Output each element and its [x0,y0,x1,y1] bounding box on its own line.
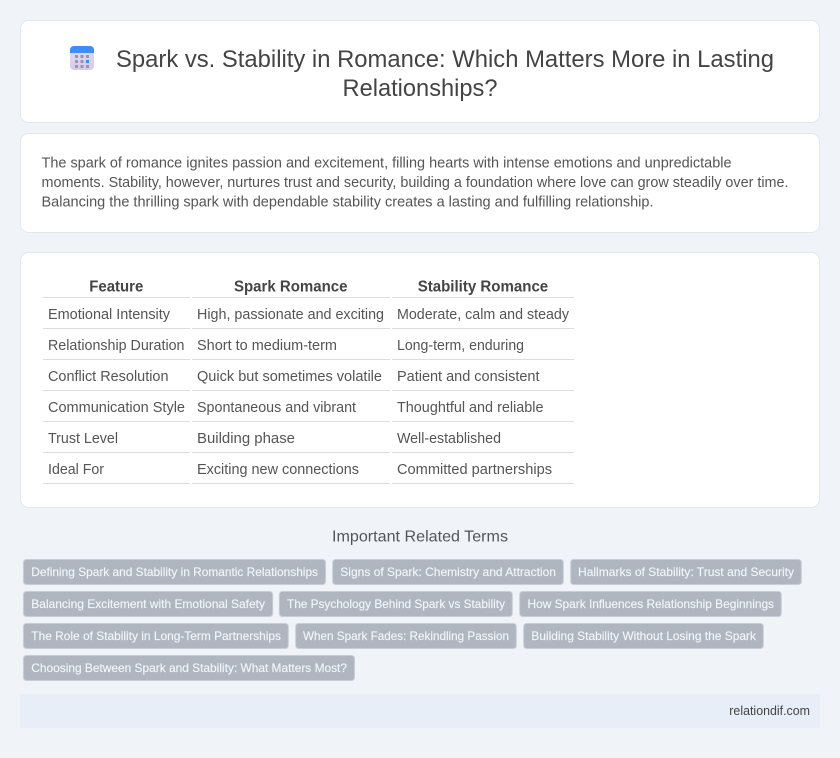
icon: calendar [70,46,94,70]
title: Relationships? [342,75,498,102]
row: conflict resolution: Quick but sometimes volatile [197,369,382,385]
tag: Hallmarks of Stability: Trust and Security [578,565,794,579]
intro paragraph [42,156,788,210]
row: relationship duration: Long-term, enduring [397,338,524,354]
intro paragraph: moments. Stability, however, nurtures trust and security, building a foundation where love can grow steadily over time. [42,175,788,191]
tag [524,624,763,648]
panel: header card [20,20,820,122]
tag [296,624,516,648]
row: ideal for: Ideal For [48,462,104,478]
row: communication style: Thoughtful and reliable [397,400,544,416]
tag: Defining Spark and Stability in Romantic Relationships [31,565,318,579]
tag [24,624,288,648]
tag: How Spark Influences Relationship Beginnings [528,597,774,611]
title: Spark vs. Stability in Romance: Which Matters More in Lasting [116,46,774,73]
intro paragraph: Balancing the thrilling spark with dependable stability creates a lasting and fulfilling relationship. [42,194,654,210]
table header [89,278,549,296]
row: relationship duration [48,338,524,354]
tag: The Psychology Behind Spark vs Stability [287,597,505,611]
tag [333,560,563,584]
title [116,46,774,102]
row: communication style: Spontaneous and vibrant [197,400,356,416]
table header: Feature [89,278,144,296]
table header: Stability Romance [418,278,549,296]
tag [571,560,801,584]
row: communication style: Communication Style [48,400,185,416]
intro paragraph: The spark of romance ignites passion and excitement, filling hearts with intense emotions and unpredictable [42,156,732,172]
tag [24,560,326,584]
panel: introduction [20,134,820,232]
tag: Building Stability Without Losing the Spark [531,629,757,643]
row: communication style [48,400,544,416]
footer: relationdif.com [729,703,810,718]
tag [24,656,354,680]
row: ideal for [48,462,552,478]
tag: Balancing Excitement with Emotional Safety [31,597,265,611]
row: ideal for: Committed partnerships [397,462,552,478]
tag [520,592,781,616]
row: trust level: Well-established [397,431,501,447]
footer [20,694,820,728]
panel: comparison table [20,252,820,508]
heading: related terms: Important Related Terms [332,528,508,546]
row: trust level: Building phase [197,431,295,447]
row: conflict resolution: Patient and consistent [397,369,540,385]
row: relationship duration: Short to medium-term [197,338,337,354]
row: trust level: Trust Level [48,431,118,447]
row: conflict resolution: Conflict Resolution [48,369,168,385]
tag: The Role of Stability in Long-Term Partnerships [31,629,281,643]
tag: Signs of Spark: Chemistry and Attraction [340,565,556,579]
row: emotional intensity: High, passionate and exciting [197,307,384,323]
tag [24,592,273,616]
row: emotional intensity: Emotional Intensity [48,307,171,323]
tag: When Spark Fades: Rekindling Passion [303,629,509,643]
related term tags [24,560,801,680]
row: ideal for: Exciting new connections [197,462,359,478]
row: emotional intensity [48,307,570,323]
row: emotional intensity: Moderate, calm and steady [397,307,570,323]
tag: Choosing Between Spark and Stability: What Matters Most? [31,661,347,675]
table header: Spark Romance [234,278,348,296]
row: relationship duration: Relationship Duration [48,338,184,354]
row: conflict resolution [48,369,540,385]
row: trust level [48,431,501,447]
tag [279,592,512,616]
